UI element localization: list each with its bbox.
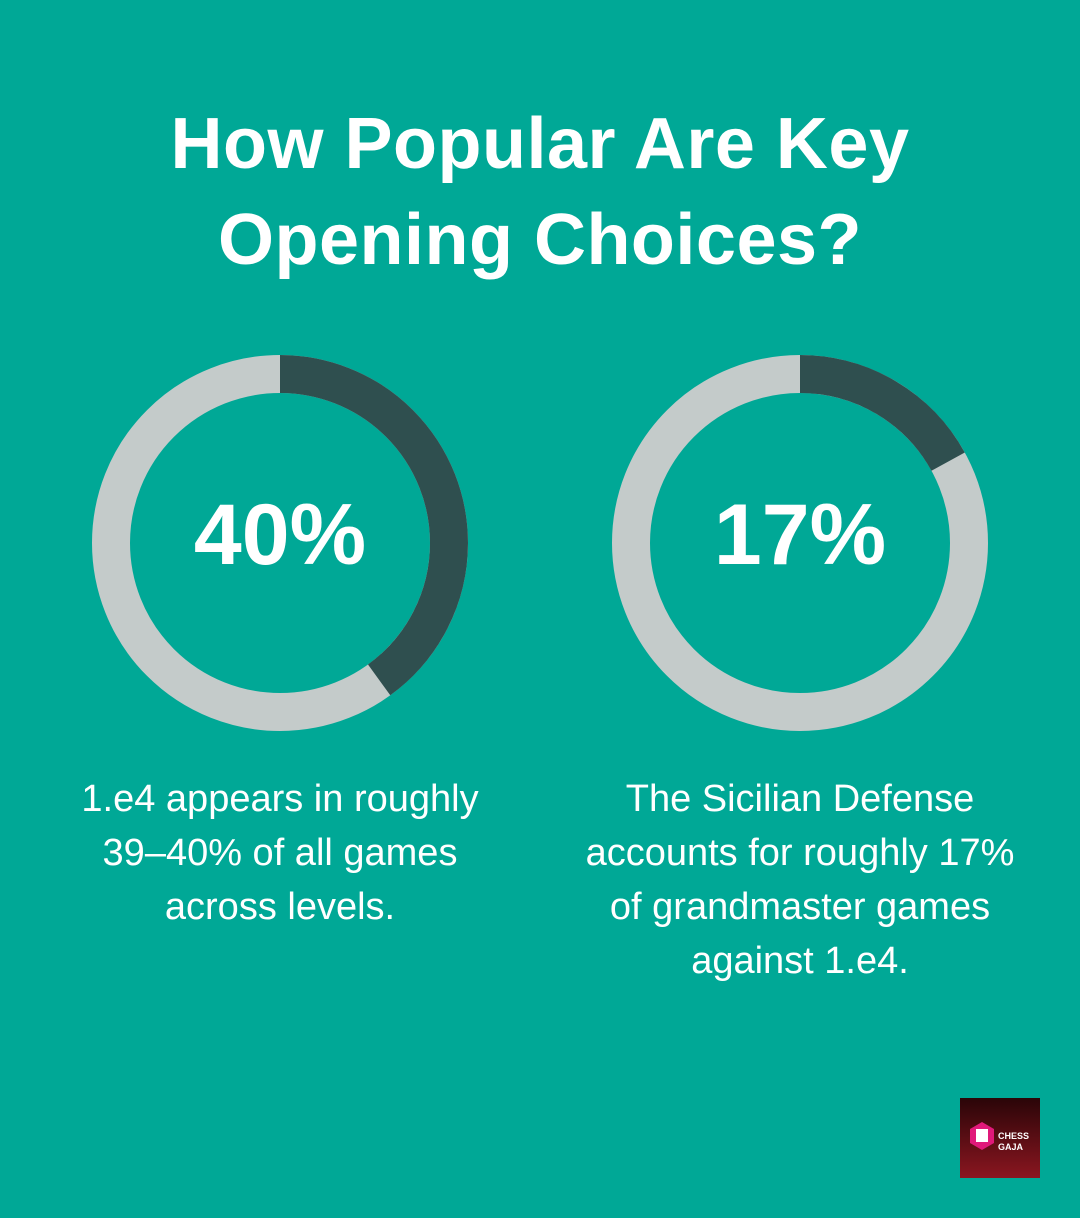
value: 17%: 17% xyxy=(714,487,886,583)
title xyxy=(170,104,910,280)
value: 40%: 40% xyxy=(194,487,366,583)
caption right: The Sicilian Defense accounts for roughly 17% of grandmaster games against 1.e4. xyxy=(586,778,1014,982)
donut: 40% xyxy=(92,355,468,731)
logo: GAJA xyxy=(998,1142,1024,1152)
title: Opening Choices? xyxy=(218,200,862,280)
title: How Popular Are Key xyxy=(170,104,910,184)
caption left: 1.e4 appears in roughly 39–40% of all games across levels. xyxy=(81,778,479,928)
donut: 17% xyxy=(612,355,988,731)
logo xyxy=(960,1098,1040,1178)
logo: CHESS xyxy=(998,1131,1029,1141)
